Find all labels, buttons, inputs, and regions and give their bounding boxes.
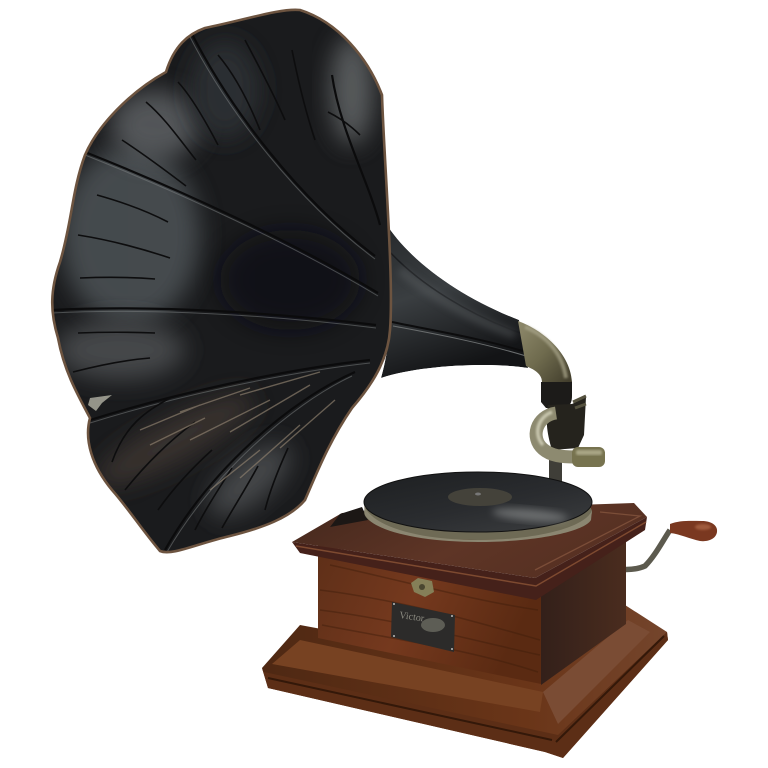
horn neck [381,222,528,378]
nameplate: Victor [399,610,425,625]
horn bell [52,10,391,552]
nameplate [391,602,455,652]
horn rim [52,10,391,552]
post [549,460,562,486]
collar [541,382,572,408]
horn etched lines [73,40,360,530]
record [364,472,592,532]
horn main ribs [52,30,380,550]
cabinet side panel [541,530,626,685]
cabinet front panel [318,545,541,684]
record label [448,488,512,506]
sound box [536,396,605,467]
horn interior shading [55,35,374,529]
horn rib highlights [52,33,378,552]
lock hasp [411,578,434,597]
turntable [364,472,592,542]
crank handle [604,521,717,570]
cabinet base [262,605,668,758]
curved brass pipe [536,413,575,457]
cabinet lid [292,503,647,600]
horn scratches and wear [88,372,335,490]
tone arm elbow [518,321,572,408]
